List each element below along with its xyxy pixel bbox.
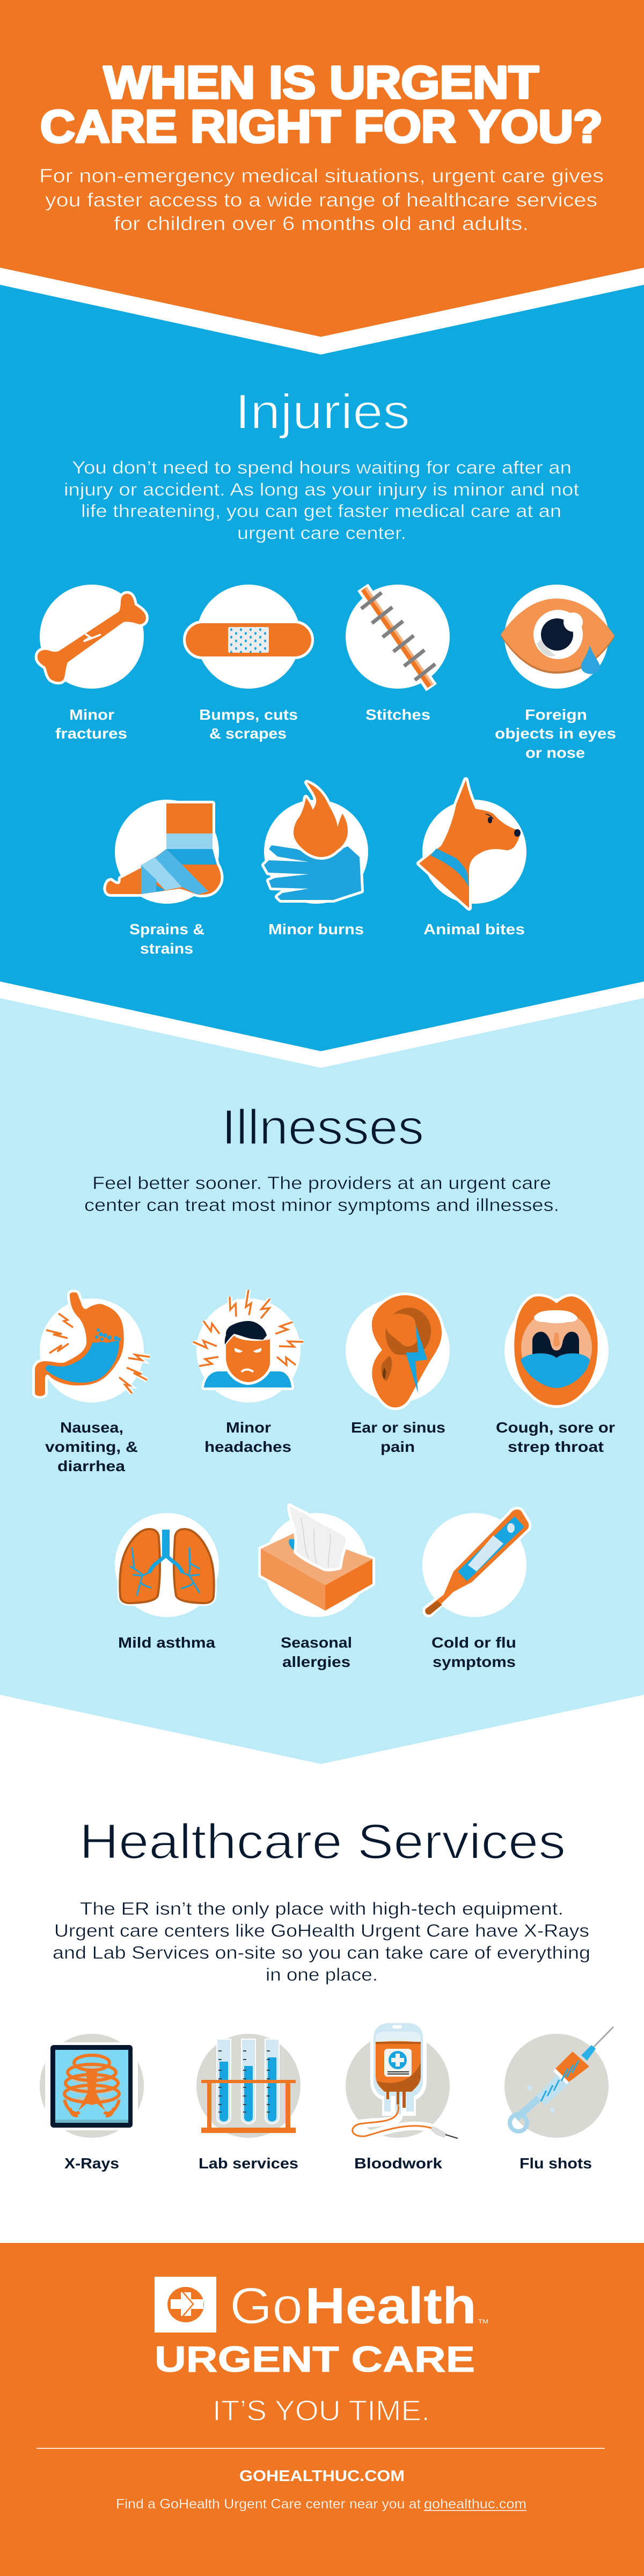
label: Cough, sore or strep throat bbox=[496, 1419, 615, 1455]
footer note with link bbox=[116, 2497, 526, 2512]
label: Cold or flu symptoms bbox=[431, 1634, 516, 1670]
website heading: GOHEALTHUC.COM bbox=[239, 2468, 405, 2485]
icon: lungs bbox=[115, 1513, 219, 1617]
illnesses paragraph: center can treat most minor symptoms and illnesses. bbox=[84, 1195, 559, 1215]
title: WHEN IS URGENT bbox=[104, 57, 539, 108]
label: Foreign objects in eyes or nose bbox=[495, 706, 616, 761]
panel: illnesses bbox=[35, 1100, 615, 1670]
label: Stitches: Stitches bbox=[365, 706, 430, 723]
icon: dog bbox=[419, 780, 526, 908]
illnesses paragraph: Feel better sooner. The providers at an urgent care bbox=[92, 1173, 551, 1193]
panel: injuries background bbox=[0, 268, 644, 1051]
intro paragraph: For non-emergency medical situations, urgent care gives bbox=[39, 165, 604, 187]
divider: header chevron white edge bbox=[0, 0, 644, 355]
icon: test tubes in rack bbox=[196, 2034, 301, 2138]
label: Minor headaches bbox=[204, 1419, 291, 1455]
label: Minor burns: Minor burns bbox=[268, 921, 364, 938]
label: Ear or sinus pain: Ear or sinus bbox=[351, 1419, 445, 1436]
icon: sprained foot bbox=[106, 800, 221, 904]
panel: healthcare services bbox=[40, 1814, 613, 2172]
label: Cold or flu symptoms: Cold or flu bbox=[431, 1634, 516, 1651]
label: Minor fractures: fractures bbox=[55, 725, 127, 742]
label: Bloodwork: Bloodwork bbox=[354, 2155, 442, 2172]
icon: eye with tear bbox=[501, 585, 614, 689]
icon: x-ray bbox=[40, 2034, 144, 2138]
label: Bumps, cuts & scrapes: & scrapes bbox=[209, 725, 287, 742]
injuries paragraph: injury or accident. As long as your injury is minor and not bbox=[64, 479, 579, 499]
icon: bone bbox=[38, 585, 146, 689]
icon: thermometer bbox=[422, 1510, 529, 1617]
label: Sprains & strains: strains bbox=[140, 940, 193, 957]
icon: open mouth bbox=[504, 1296, 609, 1405]
heading: Illnesses: Illnesses bbox=[222, 1100, 424, 1155]
icon: bandage bbox=[186, 585, 311, 689]
footer note with link: Find a GoHealth Urgent Care center near you at bbox=[116, 2497, 421, 2512]
label: Minor fractures bbox=[55, 706, 127, 742]
logo mark bbox=[155, 2277, 216, 2333]
healthcare paragraph: and Lab Services on-site so you can take care of everything bbox=[53, 1943, 590, 1962]
label: Lab services: Lab services bbox=[199, 2155, 298, 2172]
label: Minor headaches: headaches bbox=[204, 1438, 291, 1455]
icon: burned hand bbox=[264, 783, 368, 904]
label: Nausea, vomiting, & diarrhea: vomiting, & bbox=[45, 1438, 138, 1455]
header text bbox=[39, 57, 604, 234]
label: Seasonal allergies: allergies bbox=[282, 1654, 350, 1670]
logo wordmark: GoHealth: Go bbox=[230, 2277, 303, 2335]
label: Minor fractures: Minor bbox=[69, 706, 114, 723]
panel: illnesses background bbox=[0, 965, 644, 1764]
healthcare paragraph: in one place. bbox=[266, 1965, 378, 1984]
illnesses paragraph bbox=[84, 1173, 559, 1215]
healthcare paragraph: The ER isn’t the only place with high-tech equipment. bbox=[80, 1899, 564, 1918]
label: Minor headaches: Minor bbox=[226, 1419, 271, 1436]
heading: Healthcare Services: Healthcare Services bbox=[79, 1814, 566, 1869]
panel: header background bbox=[0, 0, 644, 337]
label: Flu shots: Flu shots bbox=[519, 2155, 592, 2172]
logo wordmark: GoHealth bbox=[230, 2277, 488, 2335]
icon: tissue box bbox=[261, 1506, 372, 1617]
icon: stomach bbox=[35, 1293, 150, 1403]
label: Animal bites: Animal bites bbox=[423, 921, 525, 938]
logo wordmark: GoHealth: TM bbox=[478, 2319, 488, 2325]
label: X-Rays: X-Rays bbox=[64, 2155, 119, 2172]
injuries paragraph: urgent care center. bbox=[237, 523, 406, 543]
label: Nausea, vomiting, & diarrhea: diarrhea bbox=[57, 1458, 125, 1474]
footer note with link: gohealthuc.com bbox=[424, 2497, 526, 2512]
label: Cold or flu symptoms: symptoms bbox=[433, 1654, 516, 1670]
injuries paragraph: life threatening, you can get faster medical care at an bbox=[81, 501, 561, 521]
label: Foreign objects in eyes or nose: objects in eyes bbox=[495, 725, 616, 742]
label: Ear or sinus pain bbox=[351, 1419, 445, 1455]
label: Bumps, cuts & scrapes: Bumps, cuts bbox=[199, 706, 298, 723]
intro paragraph: you faster access to a wide range of healthcare services bbox=[45, 189, 597, 211]
tagline: IT’S YOU TIME. bbox=[213, 2395, 430, 2427]
label: Sprains & strains bbox=[129, 921, 204, 957]
label: Mild asthma: Mild asthma bbox=[118, 1634, 215, 1651]
injuries paragraph bbox=[64, 457, 579, 543]
divider: injuries chevron white edge bbox=[0, 268, 644, 1068]
icon: blood bag bbox=[346, 2019, 458, 2138]
healthcare paragraph bbox=[53, 1899, 590, 1984]
icon: stitches bbox=[346, 585, 450, 689]
healthcare paragraph: Urgent care centers like GoHealth Urgent Care have X-Rays bbox=[54, 1921, 589, 1940]
label: Foreign objects in eyes or nose: Foreign bbox=[525, 706, 587, 723]
label: Cough, sore or strep throat: strep throat bbox=[508, 1438, 604, 1455]
logo wordmark: GoHealth: Health bbox=[305, 2277, 477, 2335]
label: Sprains & strains: Sprains & bbox=[129, 921, 204, 938]
label: Foreign objects in eyes or nose: or nose bbox=[525, 744, 585, 761]
label: Seasonal allergies bbox=[281, 1634, 352, 1670]
title bbox=[40, 57, 603, 152]
label: Cough, sore or strep throat: Cough, sore or bbox=[496, 1419, 615, 1436]
intro paragraph: for children over 6 months old and adults. bbox=[114, 212, 529, 234]
logo subtitle: URGENT CARE: URGENT CARE bbox=[155, 2339, 475, 2380]
injuries paragraph: You don’t need to spend hours waiting for care after an bbox=[72, 457, 572, 477]
label: Ear or sinus pain: pain bbox=[380, 1438, 415, 1455]
intro paragraph bbox=[39, 165, 604, 234]
label: Bumps, cuts & scrapes bbox=[199, 706, 298, 742]
icon: syringe bbox=[504, 2027, 613, 2138]
panel: footer bbox=[0, 2243, 644, 2576]
label: Nausea, vomiting, & diarrhea bbox=[45, 1419, 138, 1474]
panel: injuries bbox=[38, 385, 616, 957]
label: Seasonal allergies: Seasonal bbox=[281, 1634, 352, 1651]
title: CARE RIGHT FOR YOU? bbox=[40, 101, 603, 152]
icon: headache bbox=[193, 1290, 303, 1403]
label: Nausea, vomiting, & diarrhea: Nausea, bbox=[60, 1419, 123, 1436]
icon: ear bbox=[346, 1295, 450, 1407]
heading: Injuries: Injuries bbox=[235, 385, 410, 439]
